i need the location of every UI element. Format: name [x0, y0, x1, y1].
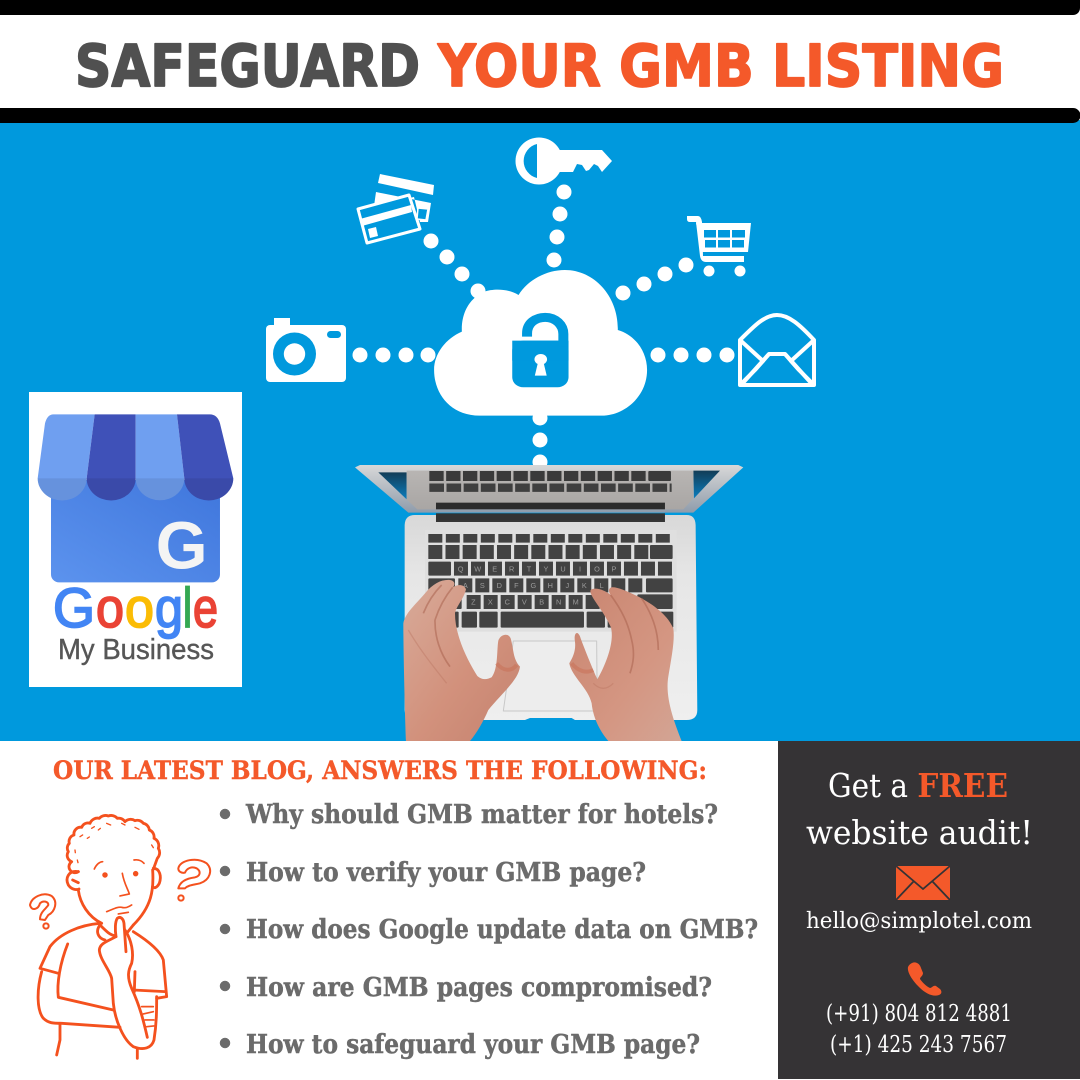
title: SAFEGUARD	[75, 32, 420, 100]
G badge: G	[156, 509, 208, 583]
My Business label: My Business	[58, 634, 214, 666]
icon: key	[516, 138, 612, 184]
laptop with typing hands	[355, 465, 743, 741]
phone number US: (+1) 425 243 7567	[830, 1032, 1007, 1058]
email address: hello@simplotel.com	[806, 909, 1032, 934]
Google wordmark	[53, 576, 218, 639]
question 5: How to safeguard your GMB page?	[246, 1030, 700, 1060]
Google wordmark: o	[125, 576, 154, 639]
Google wordmark: o	[96, 576, 124, 639]
hero background	[0, 120, 1080, 741]
illustration: thinking man	[30, 815, 210, 1058]
question mark left	[30, 894, 55, 920]
question 4: How are GMB pages compromised?	[246, 973, 712, 1003]
bullet 5	[220, 1038, 230, 1048]
panel: free website audit	[778, 741, 1080, 1079]
key legends: QWERTYUIOP	[458, 564, 617, 573]
key legends	[458, 564, 617, 607]
Google My Business logo card	[29, 392, 242, 687]
laptop base	[405, 515, 697, 720]
icon: camera	[266, 318, 346, 382]
icon: cloud with padlock	[434, 270, 647, 416]
phone number India: (+91) 804 812 4881	[826, 1001, 1012, 1027]
key legends: ASDFGHJKL	[463, 581, 604, 590]
audit headline line 1: Get a FREE	[828, 766, 1008, 805]
trackpad	[503, 641, 597, 711]
laptop lid	[355, 465, 743, 513]
hinge	[436, 513, 665, 522]
key legends: ZXCVBNM	[471, 598, 579, 607]
bullet 3	[220, 924, 230, 934]
question list	[220, 800, 758, 1060]
awning	[38, 414, 233, 500]
Google wordmark: l	[183, 576, 192, 639]
lower black bar	[0, 108, 1080, 123]
title	[75, 32, 1004, 100]
title: YOUR GMB LISTING	[437, 32, 1004, 100]
blog heading: OUR LATEST BLOG, ANSWERS THE FOLLOWING:	[53, 756, 707, 785]
top black bar	[0, 0, 1080, 15]
bullet 4	[220, 981, 230, 991]
connector dots	[352, 184, 734, 470]
Google wordmark: g	[155, 576, 183, 639]
icon: phone	[908, 962, 941, 996]
bullet 1	[220, 809, 230, 819]
keyboard	[425, 530, 677, 632]
icon: shopping cart	[687, 216, 751, 276]
question 1: Why should GMB matter for hotels?	[245, 800, 718, 830]
question mark right	[178, 860, 210, 888]
Google wordmark: G	[53, 576, 95, 639]
security network illustration	[266, 138, 814, 470]
Google wordmark: e	[193, 576, 218, 639]
icon: mail	[896, 866, 950, 900]
icon: open envelope	[740, 315, 814, 385]
right hand	[569, 587, 682, 741]
icon: credit cards	[358, 174, 434, 243]
audit headline line 2: website audit!	[806, 813, 1033, 852]
store body	[51, 480, 220, 582]
question 2: How to verify your GMB page?	[246, 858, 646, 888]
question 3: How does Google update data on GMB?	[246, 915, 758, 945]
left hand	[403, 580, 520, 741]
bullet 2	[220, 866, 230, 876]
